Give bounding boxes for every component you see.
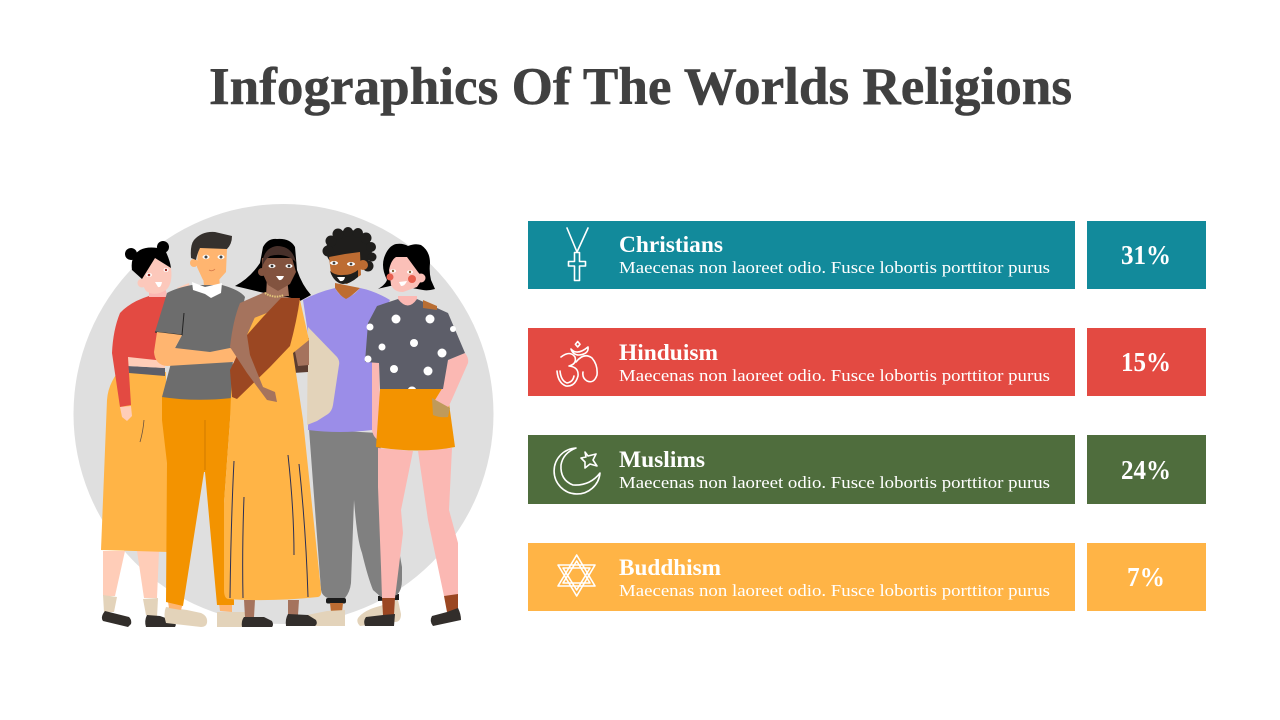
bar [528,435,1075,504]
description: Maecenas non laoreet odio. Fusce lobortis porttitor purus [619,366,1050,385]
icon: tan bag [307,327,339,425]
icon: six-pointed star [558,555,595,596]
row: Muslims [528,435,1206,504]
bar [528,543,1075,611]
label: Buddhism [619,555,721,580]
value box [1087,543,1206,611]
label: Christians [619,232,723,257]
value: 24% [1121,455,1171,485]
row: Buddhism [528,543,1206,611]
value box [1087,221,1206,289]
value box [1087,328,1206,396]
value: 31% [1121,240,1171,270]
bar [528,221,1075,289]
row: Hinduism [528,328,1206,396]
person: man in grey shirt [154,232,245,627]
row: Christians [528,221,1206,289]
value box [1087,435,1206,504]
description: Maecenas non laoreet odio. Fusce lobortis porttitor purus [619,473,1050,492]
description: Maecenas non laoreet odio. Fusce lobortis porttitor purus [619,258,1050,277]
person: woman in sari [224,239,321,627]
description: Maecenas non laoreet odio. Fusce lobortis porttitor purus [619,581,1050,600]
icon: om symbol [557,342,597,386]
label: Hinduism [619,340,718,365]
person: woman in red sweater [101,241,176,627]
background circle [74,204,494,624]
person: woman in polka-dot shirt [364,244,468,626]
icon: cross necklace [567,228,588,280]
value: 7% [1127,562,1165,592]
person: bearded man [303,227,402,626]
illustration: group of five people [74,204,494,627]
title: Infographics Of The Worlds Religions [209,58,1072,116]
bar [528,328,1075,396]
value: 15% [1121,347,1171,377]
label: Muslims [619,447,705,472]
icon: crescent and star [554,448,600,494]
